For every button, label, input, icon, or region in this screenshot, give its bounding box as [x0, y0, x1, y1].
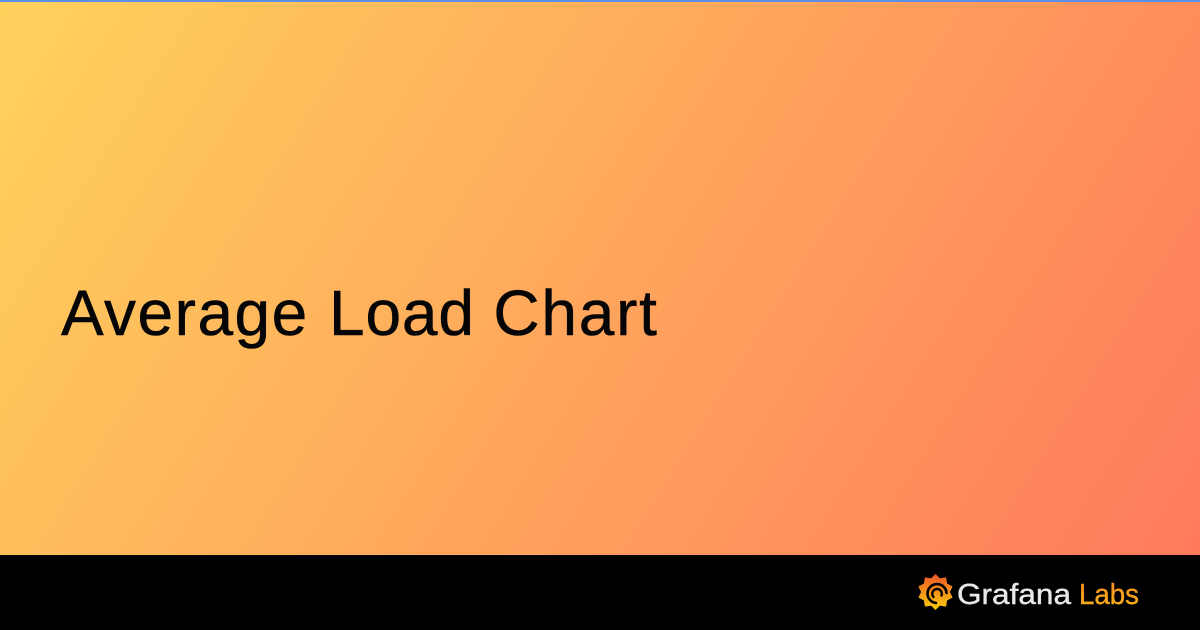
logo: Grafana Labs [918, 574, 1139, 611]
footer bar [0, 555, 1200, 630]
icon: grafana spiral gear [919, 575, 952, 609]
top accent line [0, 0, 1200, 2]
wordmark: Labs: Labs [1079, 579, 1139, 611]
wordmark: Grafana: Grafana [957, 579, 1072, 611]
title: Average Load Chart [61, 277, 659, 349]
